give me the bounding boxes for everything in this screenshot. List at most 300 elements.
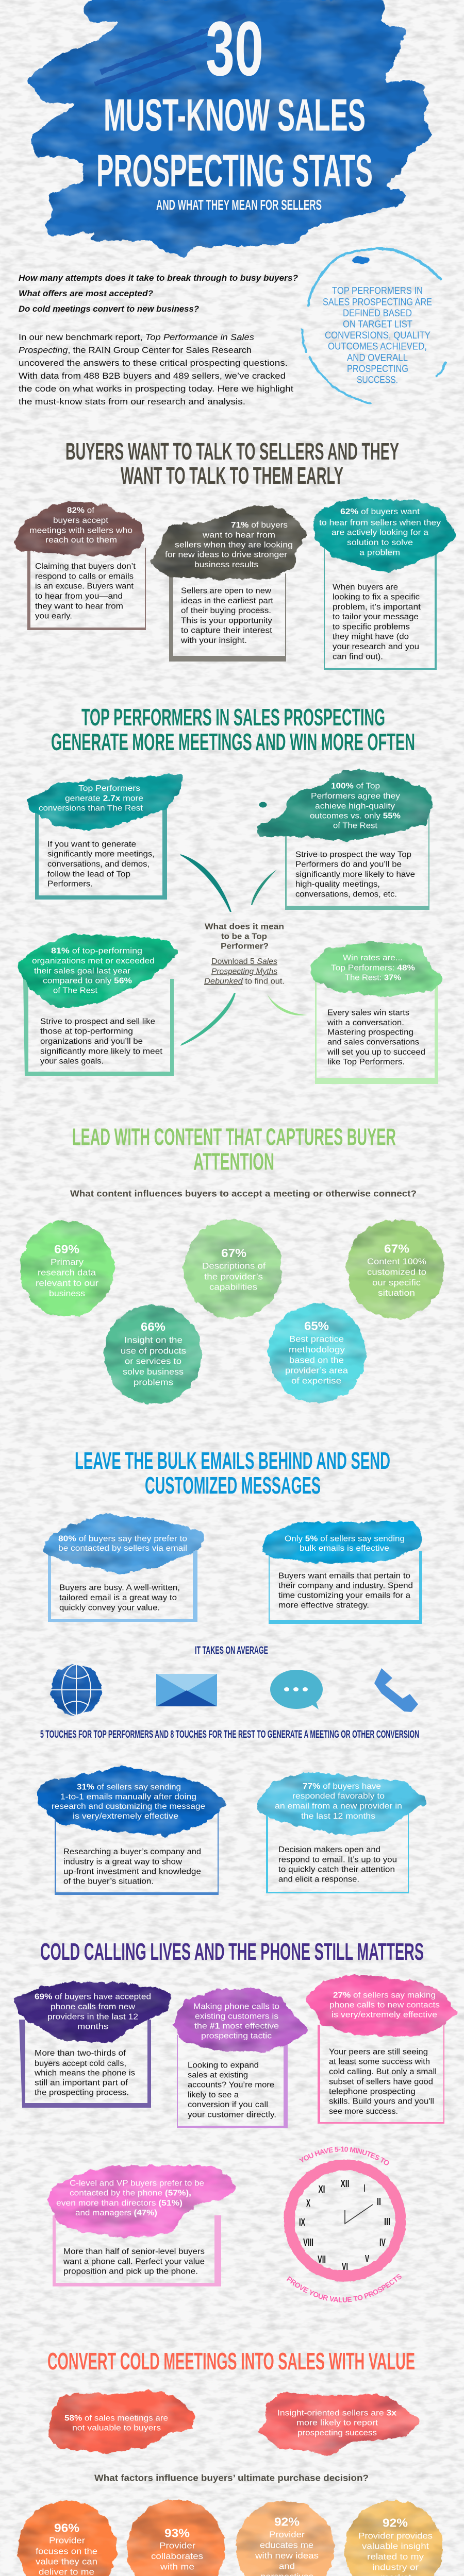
panel: 100% of top performers xyxy=(257,769,432,910)
download link: Debunked to find out. xyxy=(204,977,285,986)
panel: 81% of top-performing organizations xyxy=(18,934,179,1076)
circle: 92% valuable insight: industry or xyxy=(372,2563,419,2572)
stat text: is very/extremely effective xyxy=(73,1812,178,1821)
stat text: the #1 most effective xyxy=(194,2022,279,2031)
body text xyxy=(47,840,155,888)
stat text: contacted by the phone (57%), xyxy=(70,2189,191,2198)
heading: top performers xyxy=(51,704,415,755)
stat text: sellers when they are looking xyxy=(175,541,293,550)
circle: 92% valuable insight: related to my xyxy=(367,2552,424,2562)
callout: top performers definition ring xyxy=(302,249,445,403)
callout text: DEFINED BASED xyxy=(343,308,412,319)
circle: 96% value: value they can xyxy=(36,2557,97,2567)
body text xyxy=(188,2061,276,2119)
stat text xyxy=(331,954,415,982)
intro questions: Do cold meetings convert to new business? xyxy=(19,304,200,314)
body text: they might have (do xyxy=(333,633,409,641)
body text: follow the lead of Top xyxy=(47,870,130,878)
body text: conversations, and demos, xyxy=(47,860,150,869)
body text xyxy=(35,562,136,621)
callout text: ON TARGET LIST xyxy=(343,318,412,330)
body text: which means the phone is xyxy=(34,2069,135,2077)
body text: of the buyer’s situation. xyxy=(63,1877,154,1886)
clock ring xyxy=(289,2165,401,2276)
circle: 67% descriptions: Descriptions of xyxy=(202,1262,266,1271)
question: to be a Top xyxy=(221,933,267,941)
download link: Prospecting Myths xyxy=(211,967,277,976)
body text: your sales goals. xyxy=(40,1057,104,1065)
circle: 69% primary research: relevant to our xyxy=(36,1279,99,1288)
callout text: CONVERSIONS, QUALITY xyxy=(325,330,430,341)
circle: 67% customized content: customized to xyxy=(367,1267,426,1277)
question: What does it mean xyxy=(205,922,284,931)
stat text xyxy=(165,521,293,569)
body text xyxy=(333,583,421,661)
stat text: research and customizing the message xyxy=(52,1802,205,1811)
stat text: reach out to them xyxy=(45,536,117,545)
body text: When buyers are xyxy=(333,583,398,591)
body text: More than half of senior-level buyers xyxy=(63,2247,205,2256)
stat text: 27% of sellers say making xyxy=(333,1991,436,1999)
arrows: brush strokes toward top performer center xyxy=(180,854,307,1046)
blob: 58% of sales meetings: not valuable to buyers xyxy=(72,2424,161,2433)
clock numerals: X xyxy=(306,2198,310,2209)
body text xyxy=(63,1848,201,1886)
stat text: 80% of buyers say they prefer to xyxy=(58,1535,187,1544)
clock numerals: VIII xyxy=(303,2237,313,2248)
clock numerals: I xyxy=(364,2183,365,2194)
circle: 65% best practice: provider’s area xyxy=(285,1366,349,1376)
body text: is an excuse. Buyers want xyxy=(35,582,134,591)
blob: insight-oriented sellers: prospecting success xyxy=(297,2429,377,2437)
body text: likely to see a xyxy=(188,2091,239,2099)
stat text: their sales goal last year xyxy=(34,967,130,975)
icon: envelope xyxy=(156,1674,217,1706)
body text: and sales conversations xyxy=(327,1038,419,1047)
body text: Mastering prospecting xyxy=(327,1028,413,1037)
stat text: generate 2.7x more xyxy=(65,794,143,803)
stat text: 1-to-1 emails manually after doing xyxy=(60,1792,196,1801)
panel: 5% of sellers bulk emails xyxy=(260,1521,423,1624)
stat text: phone calls to new contacts xyxy=(329,2001,440,2010)
intro paragraph: In our new benchmark report, Top Performance in Sales xyxy=(19,332,255,342)
body text: tailored email is a great way to xyxy=(59,1594,177,1602)
circle: 66% insight: 66% xyxy=(141,1320,165,1333)
body text: they want to hear from xyxy=(35,602,123,611)
body text: the prospecting process. xyxy=(35,2089,129,2097)
body text: Researching a buyer’s company and xyxy=(63,1848,201,1856)
body text: buyers accept cold calls, xyxy=(35,2059,126,2068)
stat text: Top Performers: 48% xyxy=(331,963,415,972)
circle: 92% educates xyxy=(236,2500,334,2576)
body text: time customizing your emails for a xyxy=(278,1591,410,1600)
clock numerals: VI xyxy=(342,2261,348,2273)
body text: Sellers are open to new xyxy=(181,587,272,596)
circle: 92% educates: educates me xyxy=(260,2541,313,2550)
stat text: of The Rest xyxy=(333,822,378,831)
clock numerals xyxy=(299,2178,390,2273)
clock hands xyxy=(345,2205,373,2224)
subtitle: AND WHAT THEY MEAN FOR SELLERS xyxy=(156,197,322,213)
stat text: responded favorably to xyxy=(292,1792,385,1801)
body text xyxy=(329,2048,437,2116)
stat text: an email from a new provider in xyxy=(275,1802,402,1811)
clock: you have 5-10 minutes xyxy=(284,2146,406,2302)
circle: 67% customized content: 67% xyxy=(384,1242,409,1256)
blob: 58% of sales meetings: 58% of sales meetings are xyxy=(64,2414,168,2422)
icon: globe xyxy=(51,1665,102,1715)
stat text: Making phone calls to xyxy=(193,2002,279,2011)
circle: 67% customized content: Content 100% xyxy=(367,1257,426,1266)
title: 30: 30 xyxy=(206,5,263,92)
clock numerals: II xyxy=(377,2196,381,2208)
intro paragraph: Prospecting , the RAIN Group Center for Sales Research xyxy=(19,345,252,355)
heading: lead with content xyxy=(72,1124,396,1175)
body text: want a phone call. Perfect your value xyxy=(63,2257,205,2266)
callout text: SUCCESS. xyxy=(357,375,398,386)
circle: 96% value xyxy=(18,2500,116,2576)
stat text: 62% of buyers want xyxy=(340,507,420,516)
body text xyxy=(327,1009,425,1066)
circle: 67% descriptions xyxy=(184,1219,282,1318)
heading: leave the bulk emails: CUSTOMIZED MESSAGES xyxy=(145,1472,321,1499)
stat text xyxy=(193,2002,279,2041)
intro questions: What offers are most accepted? xyxy=(19,289,154,298)
stat text xyxy=(56,2179,204,2217)
circle: 66% insight: use of products xyxy=(121,1346,186,1355)
body text: Looking to expand xyxy=(188,2061,259,2070)
stat text: for new ideas to drive stronger xyxy=(165,551,287,560)
circle: 92% valuable insight xyxy=(345,2500,443,2576)
stat text: achieve high-quality xyxy=(315,802,395,810)
panel: 71% of buyers xyxy=(151,505,308,662)
circle: 65% best practice: Best practice xyxy=(289,1334,344,1344)
circle: 96% value: Provider xyxy=(49,2536,86,2546)
body text: significantly more likely to meet xyxy=(40,1047,163,1056)
stat text xyxy=(32,947,155,995)
body text: Performers. xyxy=(47,879,93,888)
question: what factors influence: What factors influence buyers’ ultimate purchase decision? xyxy=(94,2473,369,2483)
circle: 92% valuable insight: Provider provides xyxy=(358,2531,433,2540)
intro questions xyxy=(19,273,299,314)
circle: 92% educates: and xyxy=(279,2562,295,2571)
body text: Claiming that buyers don’t xyxy=(35,562,136,571)
circle: 66% insight: problems xyxy=(134,1378,173,1387)
callout text: OUTCOMES ACHIEVED, xyxy=(328,341,427,352)
body text: with a conversation. xyxy=(327,1019,404,1027)
stat text: phone calls from new xyxy=(51,2003,136,2011)
stat text: 69% of buyers have accepted xyxy=(35,1993,151,2002)
icon: chat bubble xyxy=(270,1670,323,1709)
body text xyxy=(59,1584,180,1612)
circle: 69% primary research: business xyxy=(49,1289,85,1298)
body text: Every sales win starts xyxy=(327,1009,409,1018)
clock numerals: VII xyxy=(318,2254,326,2265)
download link xyxy=(204,957,285,986)
stat text: even more than directors (51%) xyxy=(56,2199,183,2208)
blue watercolor blob xyxy=(27,0,432,258)
stat text: compared to only 56% xyxy=(43,976,132,985)
stat text: 100% of Top xyxy=(331,782,380,791)
body text: proposition and pick up the phone. xyxy=(63,2267,198,2276)
body text: This is your opportunity xyxy=(181,616,272,625)
body text xyxy=(180,587,274,645)
body text: your research and you xyxy=(333,642,419,651)
body text: cold calling. But only a small xyxy=(329,2067,437,2076)
stat text: the last 12 months xyxy=(301,1812,375,1821)
circle: 66% insight xyxy=(104,1305,202,1404)
body text: your customer directly. xyxy=(188,2110,276,2119)
stat text: prospecting tactic xyxy=(201,2032,272,2041)
circle: 66% insight: Insight on the xyxy=(124,1336,183,1345)
stat text: and managers (47%) xyxy=(75,2209,157,2217)
blob: insight-oriented sellers: more likely to report xyxy=(296,2419,378,2428)
stat text: are actively looking for a xyxy=(332,529,428,537)
body text: you early. xyxy=(35,612,72,621)
clock numerals: XII xyxy=(340,2178,350,2190)
body text: of their buying process. xyxy=(181,606,271,615)
stat text: be contacted by sellers via email xyxy=(58,1544,187,1553)
stat text xyxy=(275,1782,402,1821)
circle: 93% collaborates xyxy=(127,2500,225,2576)
stat text: C-level and VP buyers prefer to be xyxy=(70,2179,204,2188)
body text xyxy=(278,1845,397,1884)
panel: 77% of buyers responded xyxy=(256,1772,426,1893)
stat text: 71% of buyers xyxy=(231,521,288,530)
stat text xyxy=(285,1535,405,1553)
stat text: solution to solve xyxy=(347,538,413,547)
download link: Download 5 Sales xyxy=(211,957,277,966)
stat text xyxy=(329,1991,440,2020)
callout text: AND OVERALL xyxy=(347,352,408,363)
center callout: what does it mean to be a top performer xyxy=(204,922,285,986)
body text: industry is a great way to show xyxy=(63,1857,183,1866)
body text: high-quality meetings, xyxy=(295,880,380,889)
panel: 31% of sellers 1-to-1 emails xyxy=(37,1766,228,1895)
body text: respond to email. It’s up to you xyxy=(278,1855,397,1864)
panel: making phone calls to existing customers xyxy=(172,1989,309,2128)
body text xyxy=(34,2049,135,2097)
intro paragraph: the code on what works in prospecting today. Here we highlight xyxy=(19,384,293,394)
circle: 93% collaborates: collaborates xyxy=(151,2552,203,2561)
curved label bottom: PROVE YOUR VALUE TO PROSPECTS xyxy=(287,2274,402,2302)
body text: at least some success with xyxy=(329,2058,430,2066)
stat text: Win rates are... xyxy=(343,954,403,962)
stat text: 31% of sellers say sending xyxy=(77,1783,181,1791)
panel: 27% of sellers phone calls xyxy=(305,1975,457,2124)
body text: Buyers want emails that pertain to xyxy=(278,1571,410,1580)
circle: 93% collaborates: 93% xyxy=(164,2526,190,2539)
body text: conversion if you call xyxy=(188,2100,268,2109)
stat text xyxy=(310,782,401,831)
body text xyxy=(63,2247,205,2276)
body text: those at top-performing xyxy=(40,1027,133,1036)
circle: 69% primary research: Primary xyxy=(51,1258,84,1267)
panel: c-level and vp buyers xyxy=(47,2165,237,2286)
body text: like Top Performers. xyxy=(327,1058,405,1066)
heading: lead with content: ATTENTION xyxy=(193,1148,274,1175)
clock numerals: IX xyxy=(299,2217,305,2228)
circle: 92% valuable insight: 92% xyxy=(383,2516,408,2529)
body text: will set you up to succeed xyxy=(327,1048,425,1057)
body text: can find out). xyxy=(333,652,383,661)
stat text xyxy=(29,506,132,545)
body text: accounts? You’re more xyxy=(188,2081,274,2090)
body text: still an important part of xyxy=(35,2079,128,2088)
header: title on blue watercolor xyxy=(27,0,432,258)
blob: 58% of sales meetings xyxy=(49,2391,195,2453)
panel: win rates xyxy=(309,942,442,1084)
circle: 67% customized content: our specific xyxy=(372,1278,421,1287)
stat text: organizations met or exceeded xyxy=(32,957,155,965)
body text: Your peers are still seeing xyxy=(329,2048,428,2057)
intro questions: How many attempts does it take to break through to busy buyers? xyxy=(19,273,299,283)
body text: respond to calls or emails xyxy=(35,572,134,581)
stat text: bulk emails is effective xyxy=(300,1544,389,1553)
stat text: The Rest: 37% xyxy=(345,973,401,982)
circle: 65% best practice: methodology xyxy=(289,1345,345,1354)
body text: Buyers are busy. A well-written, xyxy=(59,1584,180,1592)
body text: Strive to prospect the way Top xyxy=(295,850,411,859)
stat text: 77% of buyers have xyxy=(303,1782,381,1791)
stat text xyxy=(35,1993,151,2031)
body text: significantly more likely to have xyxy=(295,870,415,879)
body text xyxy=(295,850,415,899)
label: it takes on average: IT TAKES ON AVERAGE xyxy=(195,1645,268,1656)
clock numerals: IV xyxy=(379,2237,386,2248)
circle: 93% collaborates: with me xyxy=(160,2562,194,2571)
stat text: existing customers is xyxy=(195,2012,278,2021)
body text: conversations, demos, etc. xyxy=(295,890,397,899)
circle: 96% value: focuses on the xyxy=(36,2547,97,2556)
question xyxy=(205,922,284,951)
body text: their company and industry. Spend xyxy=(278,1582,413,1590)
circle: 92% educates: 92% xyxy=(274,2515,300,2529)
circle: 65% best practice: of expertise xyxy=(291,1377,341,1386)
stat text: conversions than The Rest xyxy=(39,804,143,812)
circle: 92% valuable insight: valuable insight xyxy=(362,2542,429,2551)
body text: sales at existing xyxy=(188,2071,248,2080)
stat text: providers in the last 12 xyxy=(47,2012,138,2021)
callout text: TOP PERFORMERS IN xyxy=(332,285,423,297)
stat text: Performers agree they xyxy=(311,792,400,801)
stat text: business results xyxy=(194,561,258,569)
stat text: 81% of top-performing xyxy=(51,947,142,956)
stat text: a problem xyxy=(359,548,400,557)
body text: with your insight. xyxy=(180,636,247,645)
intro paragraph xyxy=(19,332,293,406)
circle: 66% insight: or services to xyxy=(125,1357,181,1366)
panel: 82% of buyers accept xyxy=(13,501,146,630)
circle: 65% best practice: based on the xyxy=(289,1355,344,1365)
stat text: outcomes vs. only 55% xyxy=(310,812,401,821)
stat text: 82% of xyxy=(67,506,95,515)
stat text xyxy=(319,507,441,557)
panel: 2.7x more conversions xyxy=(25,774,184,900)
circle: 69% primary research: 69% xyxy=(54,1243,79,1256)
blob: insight-oriented sellers xyxy=(257,2392,420,2456)
circle: 67% customized content xyxy=(346,1219,444,1318)
body text: to quickly catch their attention xyxy=(278,1865,395,1874)
body text: organizations and you’ll be xyxy=(40,1037,143,1046)
circle: 67% descriptions: the provider’s xyxy=(204,1272,263,1281)
circle: 92% educates: Provider xyxy=(269,2530,305,2539)
body text: problem, it’s important xyxy=(333,603,421,612)
blob: insight-oriented sellers: Insight-oriented sellers are 3x xyxy=(277,2409,396,2417)
body text: see more success. xyxy=(329,2107,398,2116)
circle: 65% best practice: 65% xyxy=(304,1319,329,1333)
watercolor ring xyxy=(302,249,445,403)
body text: skills. Build yours and you'll xyxy=(329,2097,434,2106)
body text: quickly convey your value. xyxy=(59,1603,160,1612)
circle: 93% collaborates: Provider xyxy=(159,2541,196,2551)
circle: 69% primary research xyxy=(20,1221,114,1317)
question: Performer? xyxy=(221,942,269,951)
circle: 67% descriptions: capabilities xyxy=(209,1282,257,1292)
clock numerals: V xyxy=(365,2253,369,2265)
stat text: buyers accept xyxy=(53,516,109,525)
body text: looking to fix a specific xyxy=(333,593,420,602)
curved label top: YOU HAVE 5-10 MINUTES TO xyxy=(299,2146,389,2165)
circle: 67% descriptions: 67% xyxy=(221,1246,246,1260)
body text: More than two-thirds of xyxy=(35,2049,126,2058)
body text: Performers do and you’ll be xyxy=(295,860,402,869)
panel: 80% of buyers prefer email xyxy=(43,1514,204,1622)
body text: to tailor your message xyxy=(333,613,419,621)
icon: phone xyxy=(374,1668,418,1712)
heading: leave the bulk emails xyxy=(75,1447,390,1499)
stat text: is very/extremely effective xyxy=(332,2011,437,2020)
body text: Strive to prospect and sell like xyxy=(40,1018,155,1026)
stat text: of The Rest xyxy=(53,986,98,995)
callout text: SALES PROSPECTING ARE xyxy=(323,296,432,308)
stat text: months xyxy=(77,2022,108,2031)
title: must-know sales prospecting stats xyxy=(96,90,373,196)
panel: 69% of buyers accepted phone calls xyxy=(12,1982,171,2108)
body text: If you want to generate xyxy=(47,840,136,849)
body text: telephone prospecting xyxy=(329,2087,416,2096)
body text: to hear from you—and xyxy=(35,592,123,601)
callout text xyxy=(323,285,432,386)
body text: more effective strategy. xyxy=(278,1601,369,1610)
question: what content influences buyers: What content influences buyers to accept a meeting or otherwise connect? xyxy=(70,1189,417,1199)
heading: buyers want to talk xyxy=(65,438,399,489)
stat text: want to hear from xyxy=(202,531,275,539)
stat text: Top Performers xyxy=(78,784,140,793)
stat text xyxy=(39,784,143,812)
circle: 66% insight: solve business xyxy=(123,1367,184,1377)
intro paragraph: the must-know stats from our research and analysis. xyxy=(19,397,245,406)
clock numerals: XI xyxy=(319,2184,325,2195)
body text xyxy=(278,1571,413,1610)
circle: 67% customized content: situation xyxy=(378,1289,415,1298)
stat text: Only 5% of sellers say sending xyxy=(285,1535,405,1544)
body text: to capture their interest xyxy=(181,626,273,635)
body text: to specific problems xyxy=(333,622,410,631)
callout text: PROSPECTING xyxy=(347,363,408,375)
body text: significantly more meetings, xyxy=(47,850,155,859)
stat text xyxy=(58,1535,187,1553)
panel: 62% of buyers xyxy=(313,498,457,670)
body text: ideas in the earliest part xyxy=(181,597,274,605)
circle: 96% value: 96% xyxy=(54,2521,79,2534)
stat text: meetings with sellers who xyxy=(29,526,132,535)
stat text xyxy=(52,1783,205,1821)
circle: 65% best practice xyxy=(269,1304,366,1403)
stat text: to hear from sellers when they xyxy=(319,518,441,527)
body text: and elicit a response. xyxy=(278,1875,359,1884)
body text: Decision makers open and xyxy=(278,1845,380,1854)
